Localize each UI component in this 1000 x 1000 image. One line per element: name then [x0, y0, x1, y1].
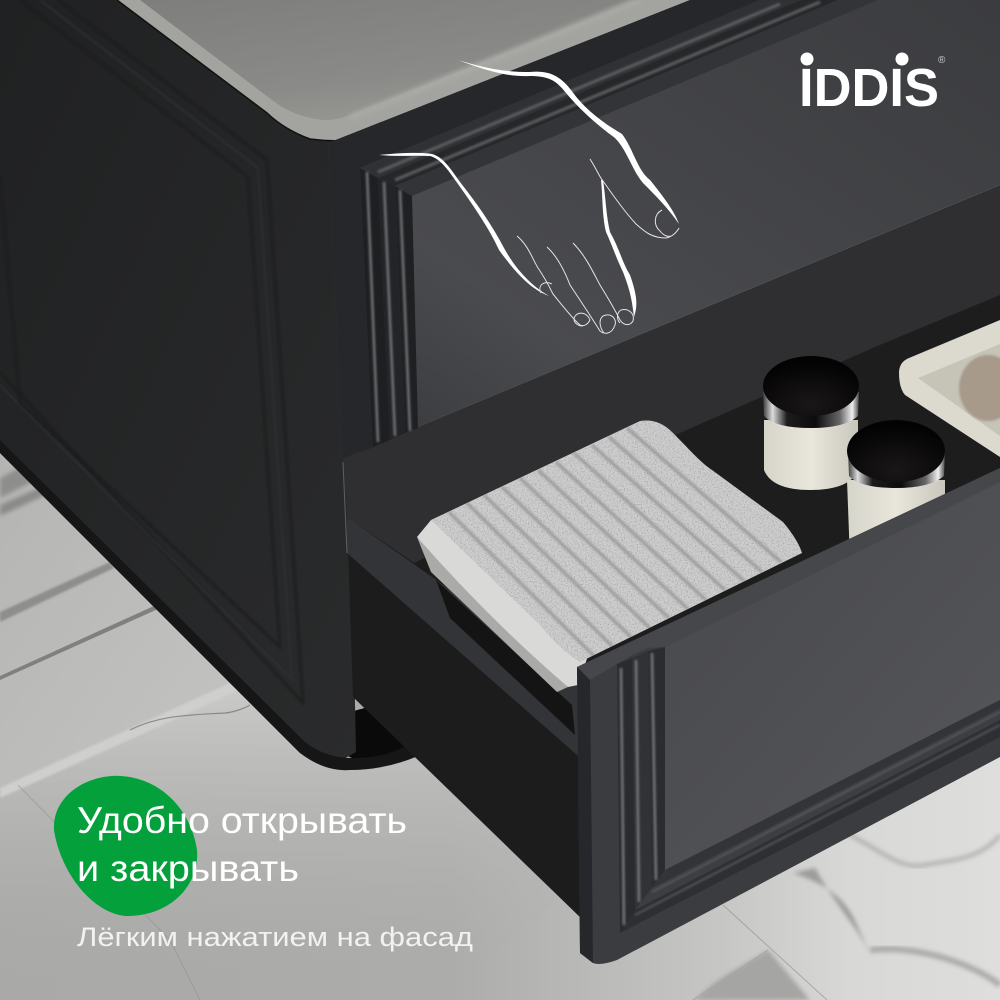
cabinet plinth shadow	[332, 707, 424, 763]
top drawer moulding: diagonal bands	[360, 0, 801, 178]
towel terry body	[431, 420, 802, 662]
hand: thin finger lines	[517, 159, 679, 333]
jar right	[847, 420, 945, 560]
headline: и закрывать	[77, 848, 299, 889]
floor tile joints and marble veins	[18, 705, 1000, 1000]
drawer moulding: diagonal bands	[620, 720, 1000, 933]
drawer left edge	[577, 667, 593, 963]
drawer top lip	[577, 468, 1000, 680]
brand logo: IDDIS	[799, 58, 939, 118]
thin light edge	[343, 462, 347, 553]
plinth	[0, 440, 418, 770]
green accent blob	[54, 776, 197, 916]
top drawer moulding: vertical bands	[360, 168, 390, 447]
towel under layers	[436, 580, 575, 735]
lower drawer front	[577, 468, 1000, 964]
tray with pumice stone	[899, 320, 1000, 457]
side panel moulding	[0, 0, 303, 703]
drawer moulding: vertical bands	[617, 658, 635, 933]
open compartment interior	[343, 185, 1000, 680]
lower drawer side	[343, 462, 585, 922]
folded towel	[417, 420, 802, 735]
subheading: Лёгким нажатием на фасад	[77, 922, 473, 952]
logo dots	[800, 52, 908, 66]
jar left	[763, 356, 859, 490]
wall and skirting board	[0, 440, 240, 798]
countertop	[117, 0, 695, 141]
hand: palm edge	[601, 180, 636, 317]
drawer floor	[410, 295, 1000, 670]
headline: Удобно открывать	[77, 800, 407, 841]
cabinet side panel	[0, 0, 418, 770]
hand line drawing	[379, 60, 679, 333]
stone	[959, 355, 1000, 421]
top drawer front	[328, 0, 1000, 458]
drawer rail	[347, 517, 585, 762]
registered mark: ®	[938, 55, 946, 66]
towel ribs	[449, 428, 781, 656]
drawer inset panel	[665, 482, 1000, 870]
hand: back outline	[458, 60, 679, 224]
hand: wrist outline	[379, 153, 549, 296]
